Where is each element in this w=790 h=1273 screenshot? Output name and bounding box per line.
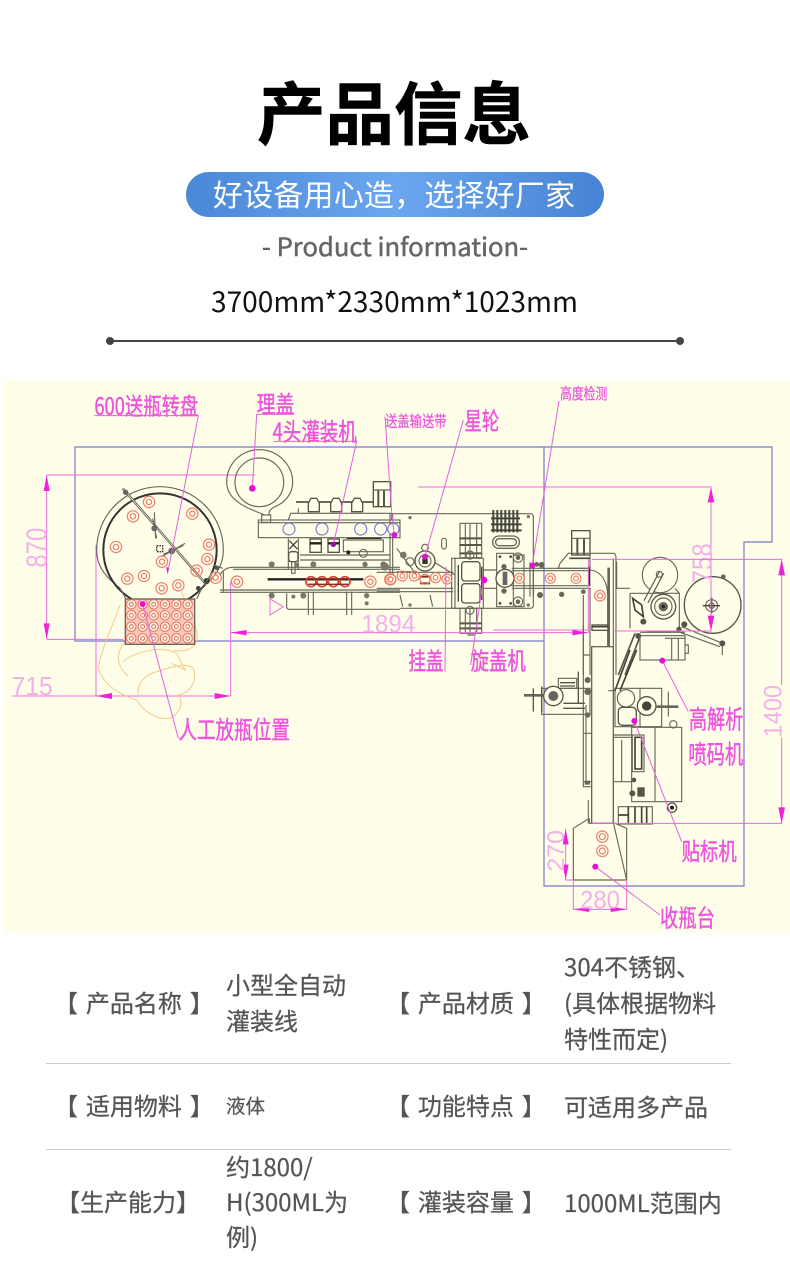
label: star wheel: 星轮	[464, 402, 499, 437]
dimension 280: 280	[580, 886, 620, 914]
left handwheel unit	[524, 672, 590, 714]
dimension 1894 right	[361, 559, 588, 638]
divider	[106, 337, 684, 345]
row 1: 小型全自动	[226, 966, 346, 1001]
valve block	[491, 510, 522, 532]
dimension 280	[573, 880, 627, 914]
label: receiving table: 收瓶台	[660, 899, 715, 934]
turntable	[97, 487, 243, 607]
dimension 270: 270	[543, 830, 570, 872]
label: receiving table	[592, 864, 715, 934]
bottle hopper	[227, 450, 293, 522]
label: turntable: 600送瓶转盘	[94, 387, 198, 421]
dimension 715: 715	[12, 671, 53, 701]
row 3: 【生产能力】	[56, 1183, 200, 1218]
title: 产品信息	[257, 60, 531, 159]
lower right section: labeler and receiving table	[524, 625, 788, 934]
labeler body	[613, 721, 682, 812]
label: turntable	[94, 387, 198, 574]
label: inkjet printer	[659, 658, 743, 771]
row 2: 可适用多产品	[564, 1088, 708, 1123]
row 2	[54, 1087, 708, 1123]
filling heads ports	[283, 523, 399, 535]
bottles along conveyor	[386, 571, 605, 601]
label: manual bottle placement	[140, 601, 290, 746]
bottles on turntable	[110, 496, 243, 594]
dimension 1400: 1400	[761, 685, 788, 737]
dimension 1400	[592, 675, 788, 823]
blue floor outline	[75, 447, 772, 886]
label: cap sorter	[249, 386, 294, 492]
motor	[618, 807, 652, 824]
hands outline	[98, 592, 197, 719]
curved vertical conveyor	[583, 553, 630, 675]
row 1: 灌装线	[226, 1002, 298, 1037]
label: filler	[273, 412, 357, 547]
row divider 2	[46, 1148, 731, 1150]
label: height detection: 高度检测	[560, 382, 607, 404]
dimension 1894 right: 1894	[361, 610, 415, 638]
dimension 715	[12, 545, 231, 701]
dimension line 1400 top	[592, 559, 782, 675]
row 2: 液体	[226, 1090, 265, 1119]
spec table	[46, 948, 731, 1253]
row divider 1	[46, 1062, 731, 1064]
main column	[583, 625, 613, 823]
dimension 870	[22, 475, 255, 639]
label: cap conveyor	[385, 409, 447, 538]
row 1: 特性而定)	[564, 1020, 668, 1055]
english heading: - Product information-	[262, 228, 528, 264]
dimension 270	[543, 829, 573, 880]
label: cap sorter: 理盖	[257, 386, 294, 420]
label: capper	[471, 577, 526, 677]
label: labeler	[631, 718, 737, 867]
star wheel	[377, 538, 455, 607]
right handwheel unit	[608, 650, 678, 727]
motor	[558, 531, 590, 568]
dimension 870: 870	[22, 528, 54, 568]
arrow 1400 top	[778, 559, 785, 575]
row 1: (具体根据物料	[564, 984, 716, 1019]
label: inkjet printer: 高解析	[689, 700, 743, 736]
label: labeler: 贴标机	[682, 832, 737, 867]
row 3: 【 灌装容量 】	[386, 1183, 546, 1218]
row 2: 【 适用物料 】	[54, 1087, 214, 1122]
filler machine	[258, 482, 400, 575]
row 3: 例)	[226, 1218, 258, 1253]
subtitle pill: 好设备用心造，选择好厂家	[213, 171, 575, 215]
panel: layout drawing	[4, 380, 790, 934]
label: cap conveyor: 送盖输送带	[385, 409, 447, 431]
label: height detection	[529, 382, 607, 569]
row 1: 【 产品材质 】	[386, 984, 546, 1019]
left section: turntable and filler	[12, 386, 400, 746]
label: star wheel	[422, 402, 499, 560]
row 3: H(300ML为	[226, 1183, 348, 1218]
label: capper: 旋盖机	[471, 642, 526, 677]
dimension 758: 758	[687, 543, 718, 583]
label: cap hanging: 挂盖	[408, 642, 443, 677]
middle section: capper and conveyor	[361, 382, 785, 677]
dimension 758	[418, 487, 718, 631]
label: manual bottle placement: 人工放瓶位置	[178, 710, 290, 746]
row 1: 304不锈钢、	[564, 948, 700, 983]
row 3: 约1800/	[226, 1148, 313, 1183]
oval slot	[493, 536, 519, 548]
conveyor right	[377, 562, 591, 598]
row 1: 【 产品名称 】	[54, 984, 214, 1019]
capper	[452, 523, 524, 635]
label: filler: 4头灌装机	[273, 412, 357, 448]
dimensions text: 3700mm*2330mm*1023mm	[211, 281, 578, 321]
conveyor with bottles	[220, 561, 400, 615]
label applicator	[618, 557, 741, 675]
row 2: 【 功能特点 】	[386, 1087, 546, 1122]
machine plate	[390, 514, 533, 608]
row 3	[56, 1148, 722, 1253]
row 1	[54, 948, 716, 1055]
label: inkjet printer: 喷码机	[688, 735, 743, 771]
bottle tray	[125, 599, 195, 644]
receiving table	[573, 818, 627, 880]
dimension 1894 left	[231, 631, 400, 634]
row 3: 1000ML范围内	[564, 1184, 722, 1219]
label: cap hanging	[408, 567, 446, 677]
